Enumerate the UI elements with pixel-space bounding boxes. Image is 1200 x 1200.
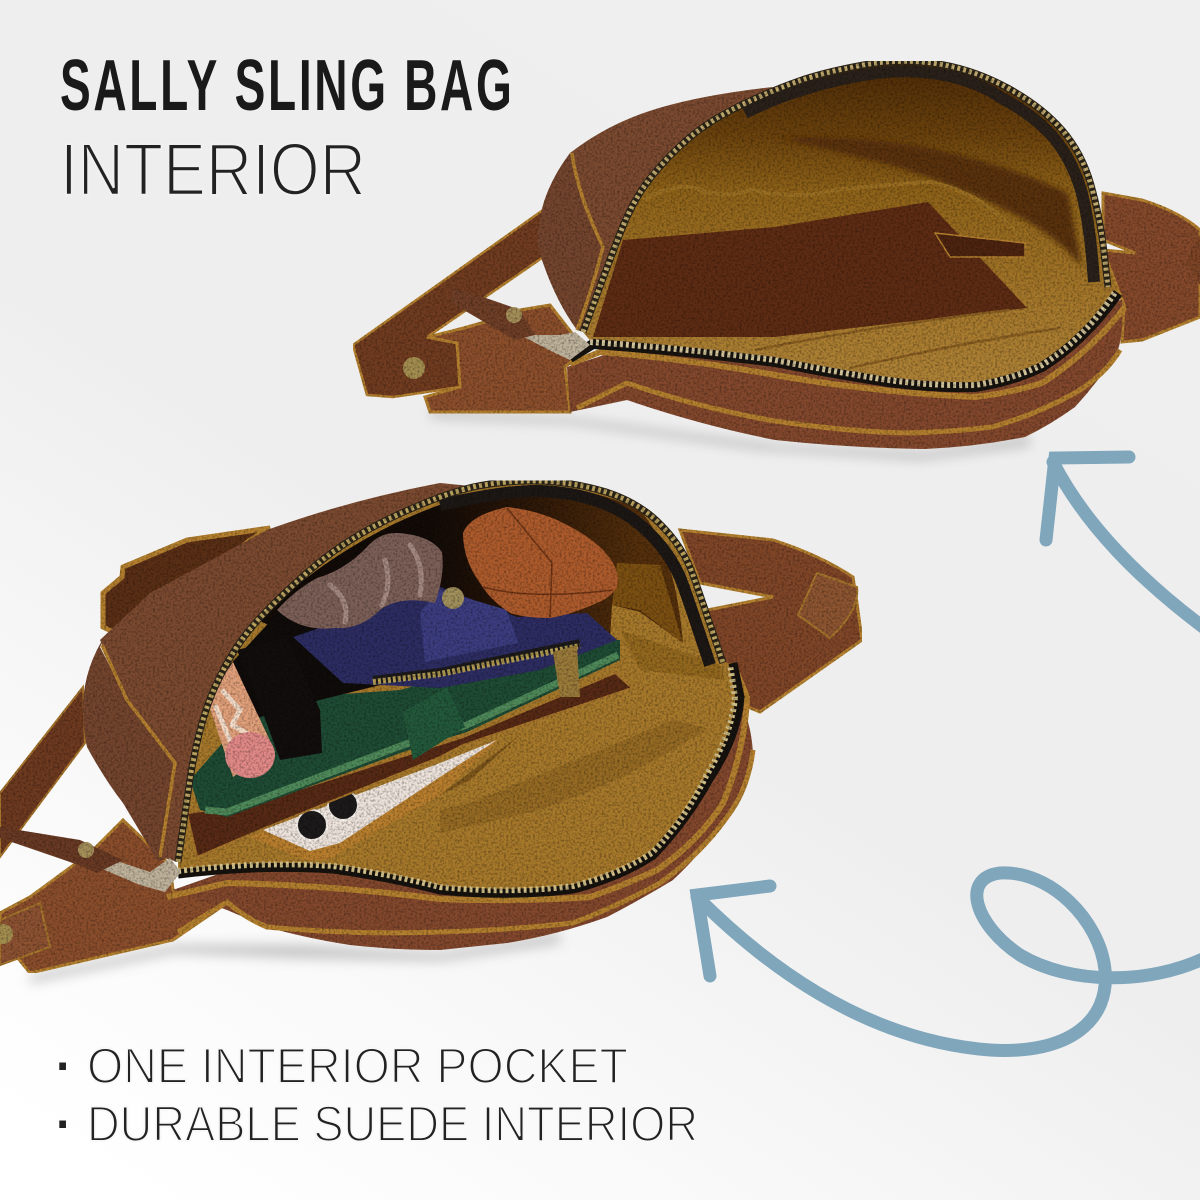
bag: filled lower view	[0, 481, 862, 973]
front zipper	[178, 663, 740, 893]
suede interior	[583, 61, 1118, 387]
green wallet strap	[403, 687, 465, 760]
strap keeper	[1186, 235, 1200, 285]
strap snap	[450, 290, 535, 340]
black box	[237, 637, 322, 760]
camera lens: upper	[328, 790, 358, 820]
interior wall lower	[612, 563, 683, 643]
flap seam	[572, 153, 603, 330]
outer flap	[570, 87, 773, 332]
suede wrinkle	[643, 182, 1025, 243]
feature: suede: DURABLE SUEDE INTERIOR	[87, 1096, 698, 1152]
interior back wall	[258, 488, 683, 643]
top zipper	[178, 481, 723, 862]
bag lower body	[567, 300, 1122, 449]
bullet: pocket: ·	[51, 1022, 74, 1100]
snap rivet	[78, 842, 94, 858]
feature list	[51, 1022, 698, 1158]
outer flap	[100, 483, 470, 862]
dark back wall right	[775, 137, 1082, 267]
right strap	[1103, 193, 1200, 342]
lipstick	[207, 662, 275, 778]
suede dark fold	[440, 735, 520, 795]
lipstick cap	[225, 732, 275, 778]
phone	[250, 738, 500, 860]
top zipper tape	[745, 71, 1094, 282]
flap seam	[102, 645, 175, 857]
blue wallet	[293, 587, 617, 688]
title: SALLY SLING BAG	[60, 44, 512, 125]
scrunchie folds	[330, 545, 421, 622]
left side panel	[537, 153, 603, 330]
zipper pull	[520, 332, 590, 360]
suede interior	[178, 481, 738, 891]
green wallet	[190, 640, 620, 817]
bag shadows	[30, 410, 1030, 983]
right strap	[680, 530, 862, 712]
dark pocket void	[225, 600, 400, 720]
snap	[442, 587, 464, 609]
rim	[167, 673, 747, 900]
earbud seams	[483, 508, 613, 617]
lipstick pattern	[215, 690, 250, 745]
lower seam	[577, 350, 1120, 433]
strap tab	[0, 820, 227, 973]
left side panel	[83, 633, 175, 860]
interior pocket	[593, 202, 1027, 337]
suede fold	[755, 310, 1060, 368]
title: INTERIOR	[60, 128, 366, 211]
zipper pull	[100, 858, 181, 892]
lower body	[173, 690, 753, 950]
back left strap	[103, 528, 270, 640]
blue wallet strap	[420, 590, 518, 662]
pocket front	[187, 673, 632, 857]
blue wallet zipper	[373, 643, 580, 680]
strap loop	[0, 903, 50, 965]
green wallet edge	[205, 655, 618, 812]
left strap	[0, 687, 85, 857]
strap snap	[0, 827, 123, 873]
arrow: to top bag	[1046, 457, 1200, 630]
earbud case	[463, 507, 618, 618]
top zipper	[583, 61, 1108, 332]
strap tab	[425, 305, 585, 412]
scrunchie	[277, 533, 443, 629]
zip pull	[553, 645, 580, 697]
rivet	[403, 357, 425, 379]
arrow: to bottom bag	[697, 873, 1200, 1050]
bullet: suede: ·	[51, 1080, 74, 1158]
feature: pocket: ONE INTERIOR POCKET	[87, 1038, 628, 1094]
snap rivet	[506, 307, 522, 323]
left strap	[353, 210, 543, 397]
top zipper tape	[440, 491, 710, 665]
strap keeper	[798, 573, 857, 638]
camera lens: lower	[297, 810, 327, 840]
rivet	[0, 924, 13, 944]
lower seam	[178, 750, 753, 933]
suede shadow	[620, 630, 725, 680]
front zipper	[570, 293, 1118, 387]
rim	[570, 307, 1125, 397]
title	[60, 44, 512, 211]
bag: empty top view	[353, 61, 1200, 449]
pocket tab	[935, 233, 1025, 257]
suede fold band	[440, 720, 707, 833]
